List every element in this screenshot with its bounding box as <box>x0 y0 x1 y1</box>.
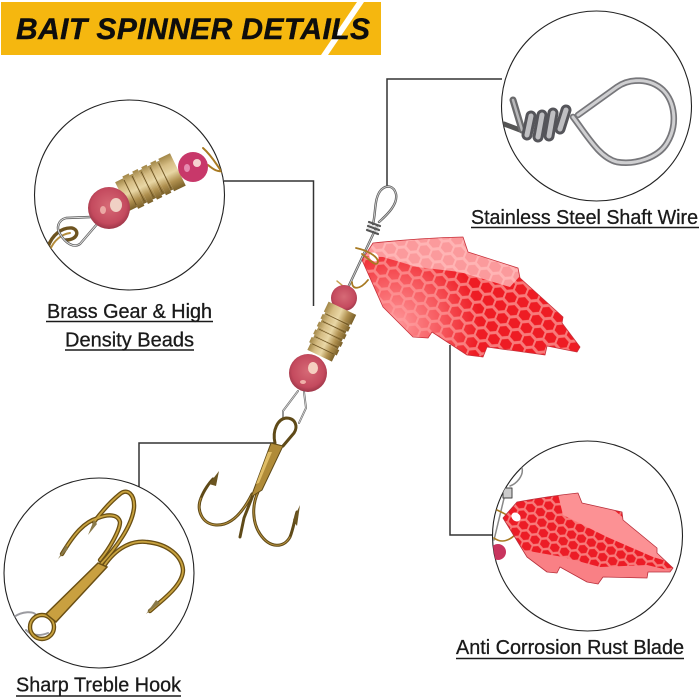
label: sharp treble hook: Sharp Treble Hook <box>16 674 182 696</box>
lower wire <box>283 391 306 423</box>
split ring <box>14 612 48 635</box>
wire stub <box>504 124 528 133</box>
label: brass gear: Density Beads <box>65 330 194 352</box>
connector: treble hook callout <box>139 443 276 487</box>
connector: blade callout <box>450 345 492 535</box>
label: anti corrosion rust blade: Anti Corrosion Rust Blade <box>456 637 684 659</box>
wire loop <box>573 81 674 163</box>
label: brass gear <box>46 301 213 352</box>
coil <box>513 100 566 137</box>
hook body <box>30 492 183 639</box>
wire <box>58 217 98 246</box>
callout circle: treble hook <box>4 478 194 668</box>
top ring <box>203 148 222 172</box>
small wire <box>494 468 522 540</box>
title banner <box>1 2 381 55</box>
connector: steel wire callout <box>387 79 502 187</box>
small bead <box>493 544 506 560</box>
label: brass gear: Brass Gear & High <box>47 301 212 323</box>
large bead <box>88 187 130 229</box>
small bead <box>178 152 208 182</box>
split ring <box>337 248 378 288</box>
small ring <box>494 510 518 541</box>
upper bead <box>331 285 357 311</box>
callout circle: stainless steel wire <box>502 11 692 201</box>
brass gear <box>306 302 356 362</box>
hook eye <box>48 228 77 250</box>
barbs <box>58 520 160 614</box>
lure blade <box>362 236 580 358</box>
shank <box>46 563 107 622</box>
connector: brass gear callout <box>224 181 314 306</box>
callout circle: brass gear and beads <box>34 100 224 290</box>
treble hook <box>199 418 300 545</box>
title: BAIT SPINNER DETAILS <box>16 13 370 46</box>
inset blade <box>502 492 674 584</box>
shaft wire with loop <box>344 187 396 296</box>
gear <box>114 153 186 213</box>
lower bead <box>289 354 327 392</box>
label: stainless steel shaft wire: Stainless Steel Shaft Wire <box>471 207 698 229</box>
callout circle: rust blade <box>490 441 682 631</box>
main spinner lure <box>199 187 585 545</box>
